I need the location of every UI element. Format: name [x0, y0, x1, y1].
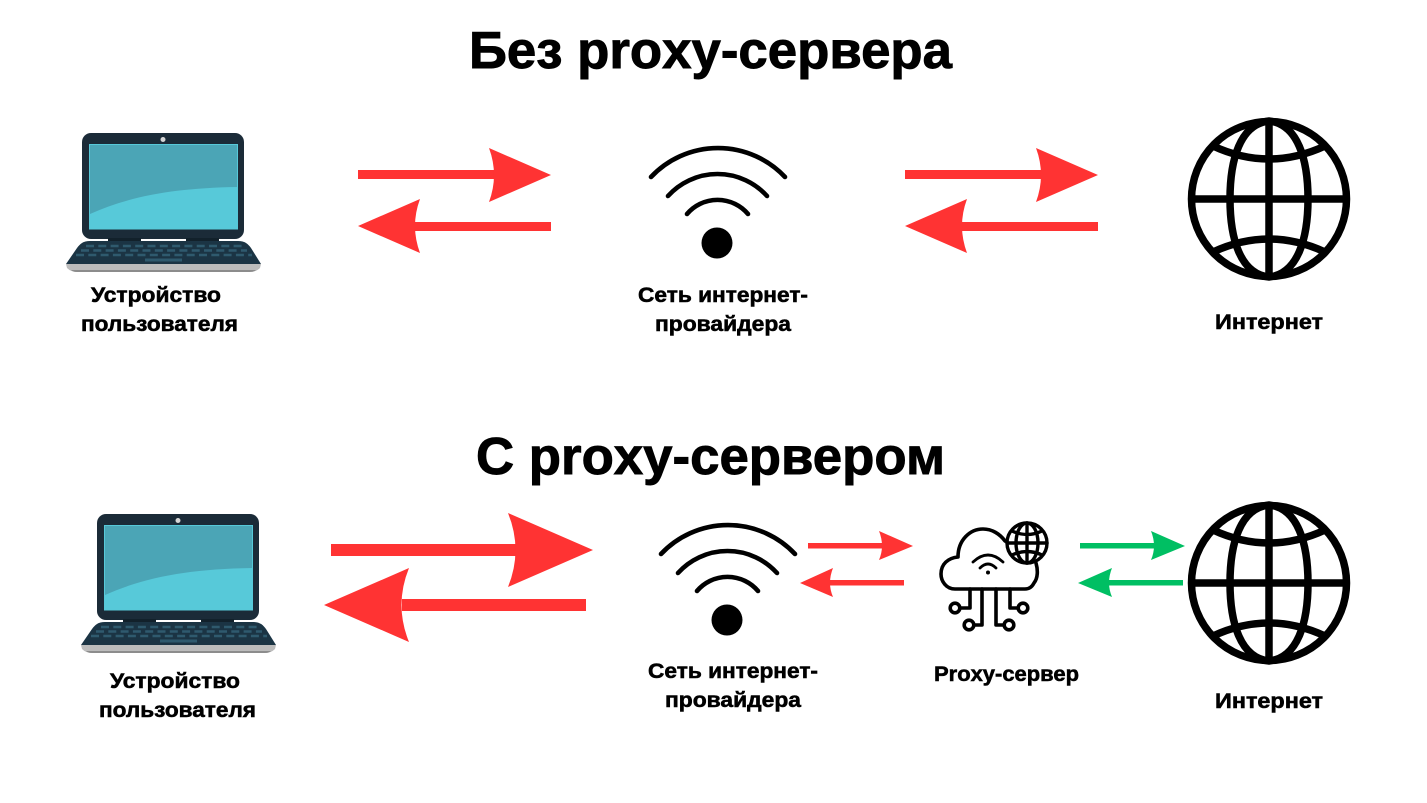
icon: proxy cloud server [941, 523, 1047, 630]
cloud outline [941, 529, 1037, 589]
label: internet, top row: Интернет [1215, 311, 1323, 334]
label: ISP network, top row: провайдера [655, 313, 791, 336]
label: user device, top row [81, 284, 238, 336]
title: with proxy: С proxy-сервером [476, 428, 945, 486]
label: user device, bottom row: пользователя [99, 699, 256, 722]
label: ISP network, bottom row: Сеть интернет- [648, 660, 818, 683]
icon: globe, top row [1191, 121, 1347, 277]
label: user device, bottom row: Устройство [110, 670, 240, 693]
label: ISP network, top row [638, 284, 808, 336]
label: user device, bottom row [99, 670, 256, 722]
label: ISP network, top row: Сеть интернет- [638, 284, 808, 307]
arrows: proxy to internet [1078, 531, 1185, 597]
label: ISP network, bottom row: провайдера [665, 689, 801, 712]
arrows: ISP to internet, top row [905, 148, 1098, 253]
icon: wifi, bottom row [661, 525, 795, 636]
arrows: laptop to ISP, bottom row [324, 513, 593, 642]
icon: laptop, top row [66, 133, 261, 272]
arrows: laptop to ISP, top row [358, 148, 551, 253]
icon: wifi, top row [651, 148, 785, 258]
icon: laptop, bottom row [81, 514, 276, 653]
small globe [1007, 523, 1047, 563]
label: user device, top row: Устройство [91, 284, 221, 307]
circuit lines [960, 589, 1018, 625]
icon: globe, bottom row [1191, 505, 1347, 661]
label: user device, top row: пользователя [81, 313, 238, 336]
arrows: ISP to proxy [800, 531, 913, 597]
label: proxy server: Proxy-сервер [934, 663, 1079, 686]
title: without proxy: Без proxy-сервера [469, 22, 953, 80]
cloud wifi [973, 555, 1003, 568]
label: internet, bottom row: Интернет [1215, 690, 1323, 713]
label: ISP network, bottom row [648, 660, 818, 712]
